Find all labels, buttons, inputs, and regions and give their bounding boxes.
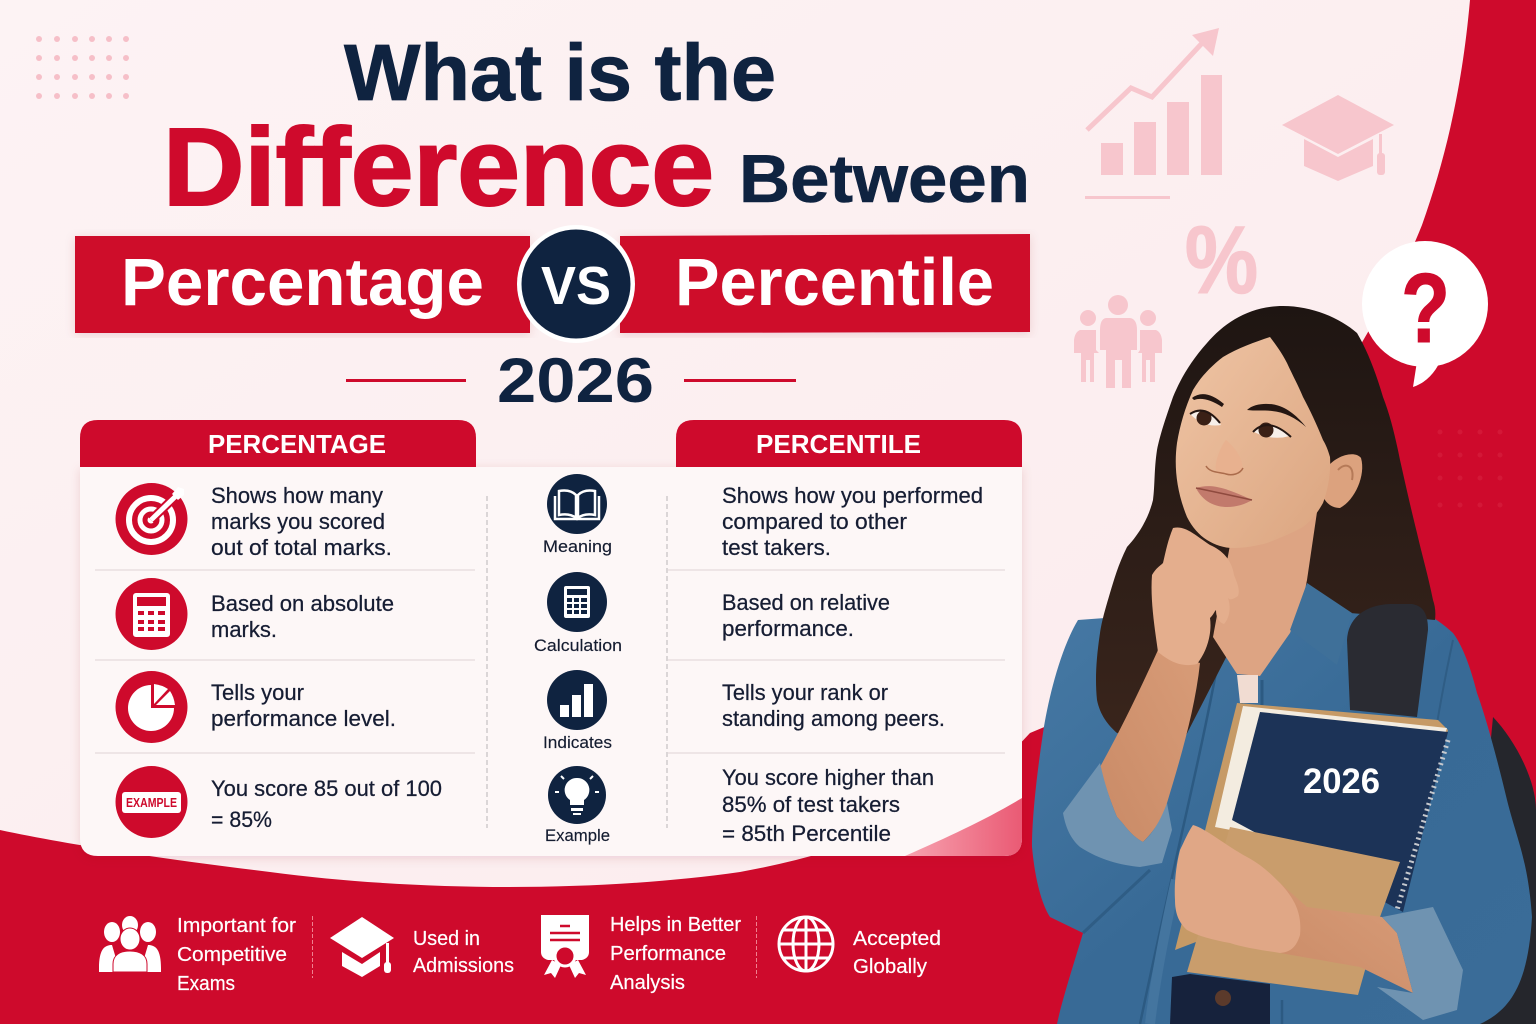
hair: [1096, 306, 1435, 747]
illustration: student holding books: [1032, 306, 1536, 1024]
benefit: performance analysis: Performance: [610, 943, 726, 965]
percentage text: meaning: out of total marks.: [211, 535, 392, 560]
percentage text: example: = 85%: [211, 807, 272, 832]
benefit: competitive exams: Important for: [177, 915, 296, 937]
percentage text: calculation: Based on absolute: [211, 591, 394, 616]
benefit: competitive exams: Competitive: [177, 944, 287, 966]
benefit: performance analysis: [610, 914, 741, 994]
benefit: performance analysis: Analysis: [610, 972, 685, 994]
benefit: accepted globally: [853, 928, 941, 978]
icon: example badge: [116, 766, 188, 838]
icon: graduation cap: [1282, 95, 1394, 181]
percentile text: meaning: Shows how you performed: [722, 483, 983, 508]
benefit: admissions: Used in: [413, 928, 480, 950]
banner: percentage vs percentile: Percentage: [121, 245, 484, 320]
icon: indicates bars: [547, 670, 607, 730]
face: [1176, 337, 1330, 548]
benefit: competitive exams: Exams: [177, 973, 235, 995]
backpack: [1440, 717, 1536, 1024]
banner: percentage vs percentile: VS: [541, 256, 611, 316]
title: What is the: [344, 28, 776, 117]
column heading: percentile: PERCENTILE: [756, 429, 921, 459]
percentile text: indicates: [722, 680, 945, 731]
percentile text: meaning: compared to other: [722, 509, 908, 534]
percentile text: indicates: standing among peers.: [722, 706, 945, 731]
banner: percentage vs percentile: [75, 225, 1030, 343]
rolled sleeve right: [1377, 907, 1463, 1020]
speech bubble with question mark: [1362, 241, 1488, 387]
shoulder strap: [1347, 604, 1428, 717]
neck: [1213, 512, 1317, 676]
dot pattern: [36, 36, 129, 99]
icon: people: [1074, 295, 1162, 388]
percentile text: indicates: Tells your rank or: [722, 680, 888, 705]
jeans: [1170, 974, 1270, 1024]
year heading: [346, 346, 796, 416]
percentage text: indicates: [211, 680, 396, 731]
percentile text: example: = 85th Percentile: [722, 821, 891, 846]
icon: calculation: [547, 572, 607, 632]
icon: percent sign: %: [1185, 207, 1258, 314]
percentage text: calculation: [211, 591, 394, 642]
icon: certificate: [541, 915, 589, 978]
percentage text: meaning: marks you scored: [211, 509, 385, 534]
title: Between: [739, 141, 1030, 217]
comparison table: [80, 420, 1022, 856]
label: example: Example: [545, 826, 610, 845]
percentage text: meaning: [211, 483, 392, 560]
faint background icons: [1074, 28, 1394, 388]
icon: target: [116, 483, 188, 555]
percentile text: calculation: performance.: [722, 616, 854, 641]
icon: pie chart: [116, 671, 188, 743]
percentile text: example: [722, 765, 934, 846]
speech bubble with question mark: ?: [1401, 253, 1450, 363]
shirt collar: [1290, 583, 1352, 665]
forearm: [1100, 650, 1200, 842]
icon: group of people: [99, 916, 161, 972]
percentage text: indicates: performance level.: [211, 706, 396, 731]
percentage text: example: [211, 776, 442, 832]
year heading: 2026: [497, 346, 654, 416]
icon: calculator: [116, 578, 188, 650]
percentile text: meaning: [722, 483, 983, 560]
percentile text: example: 85% of test takers: [722, 792, 900, 817]
icon: meaning book: [547, 474, 607, 534]
icon: growth chart: [1085, 28, 1222, 199]
label: indicates: Indicates: [543, 733, 612, 752]
title: [163, 28, 1030, 229]
title: Difference: [163, 106, 714, 229]
benefit: competitive exams: [177, 915, 296, 995]
tee: [1237, 675, 1258, 703]
holding hand: [1175, 825, 1300, 953]
label: calculation: Calculation: [534, 636, 622, 655]
column heading: percentage: PERCENTAGE: [208, 429, 386, 459]
denim shirt: [1032, 580, 1532, 1024]
percentile text: meaning: test takers.: [722, 535, 831, 560]
icon: graduation cap: [330, 917, 394, 977]
right forearm: [1262, 883, 1413, 993]
stack of books: [1175, 703, 1448, 995]
percentile text: example: You score higher than: [722, 765, 934, 790]
percentage text: example: You score 85 out of 100: [211, 776, 442, 801]
benefit: admissions: Admissions: [413, 955, 514, 977]
faint dots on red: [1438, 430, 1502, 508]
hand on chin: [1152, 527, 1239, 665]
ear: [1322, 454, 1362, 508]
label: meaning: Meaning: [543, 537, 612, 556]
benefit: performance analysis: Helps in Better: [610, 914, 741, 936]
benefit: accepted globally: Accepted: [853, 928, 941, 950]
benefit: admissions: [413, 928, 514, 977]
icon: example lightbulb: [548, 766, 606, 824]
footer benefits strip: [99, 914, 941, 995]
percentage text: calculation: marks.: [211, 617, 277, 642]
banner: percentage vs percentile: Percentile: [675, 245, 994, 320]
icon: example badge: EXAMPLE: [126, 795, 177, 810]
rolled sleeve left: [1063, 763, 1172, 867]
percentile text: calculation: Based on relative: [722, 590, 890, 615]
stack of books: 2026: [1303, 762, 1380, 801]
benefit: accepted globally: Globally: [853, 956, 927, 978]
percentile text: calculation: [722, 590, 890, 641]
percentage text: indicates: Tells your: [211, 680, 304, 705]
percentage text: meaning: Shows how many: [211, 483, 384, 508]
icon: globe: [779, 917, 833, 971]
